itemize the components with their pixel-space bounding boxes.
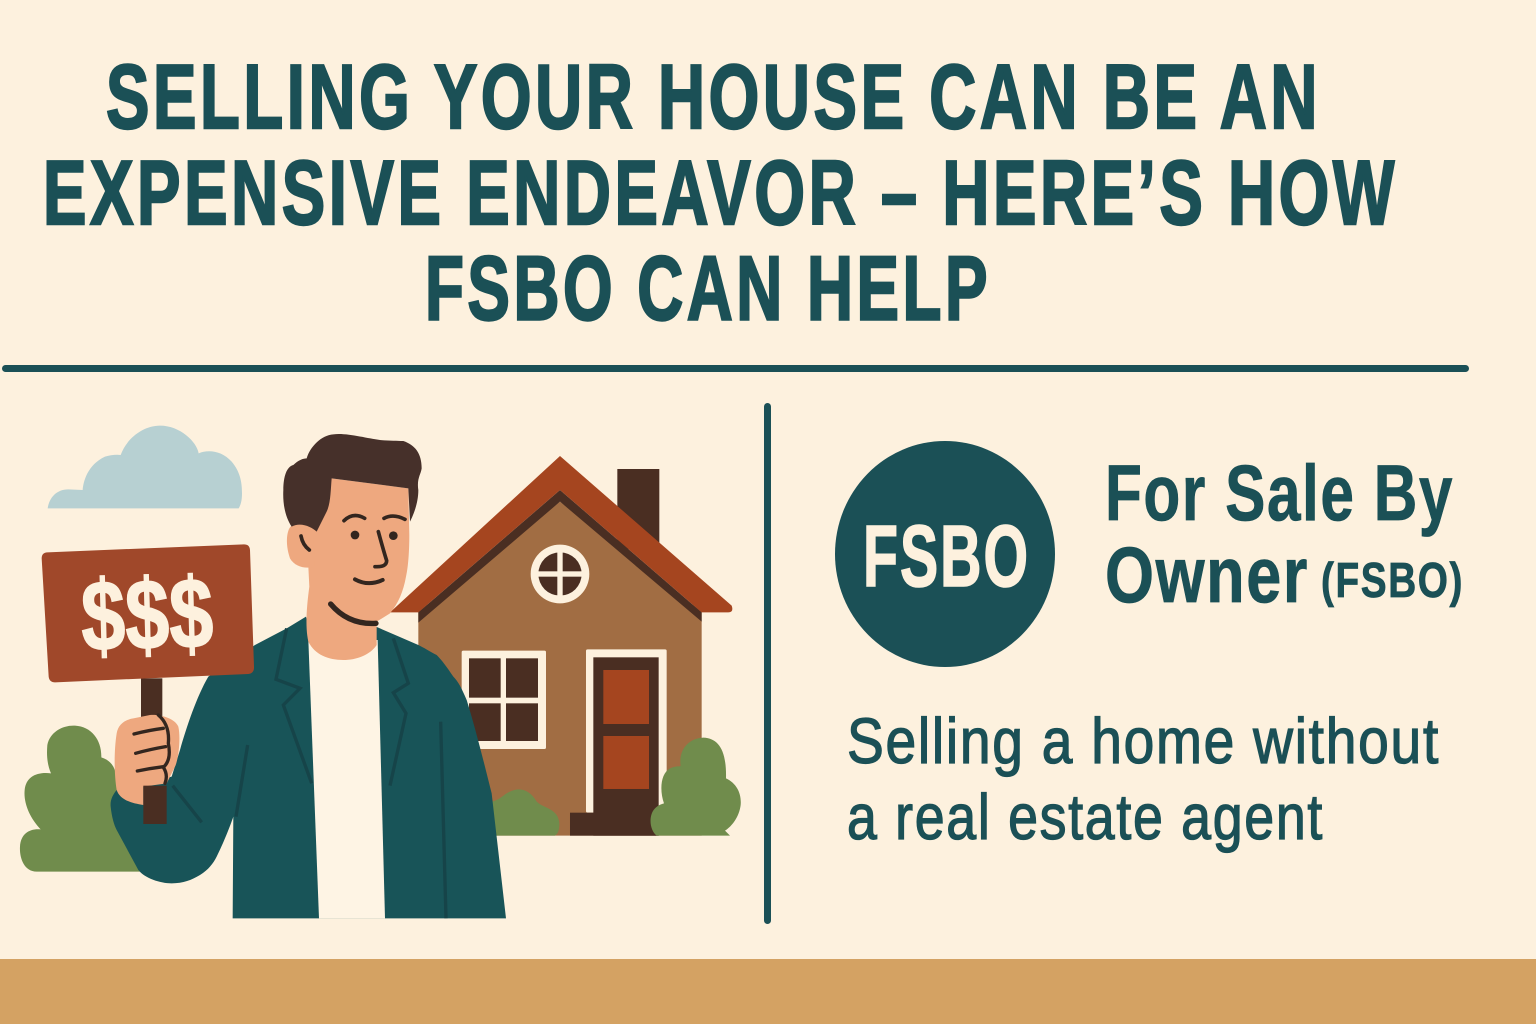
illustration: house <box>390 456 741 836</box>
house round window <box>531 545 589 603</box>
house door <box>570 649 667 836</box>
title <box>43 47 1398 340</box>
jacket <box>111 617 506 918</box>
hand <box>115 715 179 805</box>
illustration: sign with post and hand <box>42 544 254 824</box>
heading: For Sale By Owner: Owner <box>1105 530 1309 619</box>
title: FSBO CAN HELP <box>425 238 991 340</box>
illustration: man <box>111 434 506 918</box>
face details <box>301 515 405 623</box>
shirt <box>308 640 385 918</box>
hair <box>283 434 422 532</box>
house window <box>462 651 546 749</box>
heading: For Sale By Owner <box>1105 448 1464 619</box>
sign board <box>42 544 254 682</box>
bottom band <box>0 959 1536 1024</box>
jacket lines <box>173 628 446 918</box>
description text: Selling a home without <box>847 705 1440 777</box>
sign post <box>141 678 162 720</box>
FSBO circle badge <box>835 441 1055 667</box>
description text <box>847 705 1440 853</box>
illustration: left bush <box>20 726 140 872</box>
sign text: $$$ <box>80 557 215 673</box>
description text: a real estate agent <box>847 781 1324 853</box>
house bushes <box>492 738 741 836</box>
FSBO circle badge: FSBO <box>863 508 1030 605</box>
illustration: cloud <box>48 426 242 508</box>
ear <box>287 524 315 568</box>
neck and face <box>306 478 409 660</box>
heading: For Sale By Owner: (FSBO) <box>1321 554 1464 608</box>
